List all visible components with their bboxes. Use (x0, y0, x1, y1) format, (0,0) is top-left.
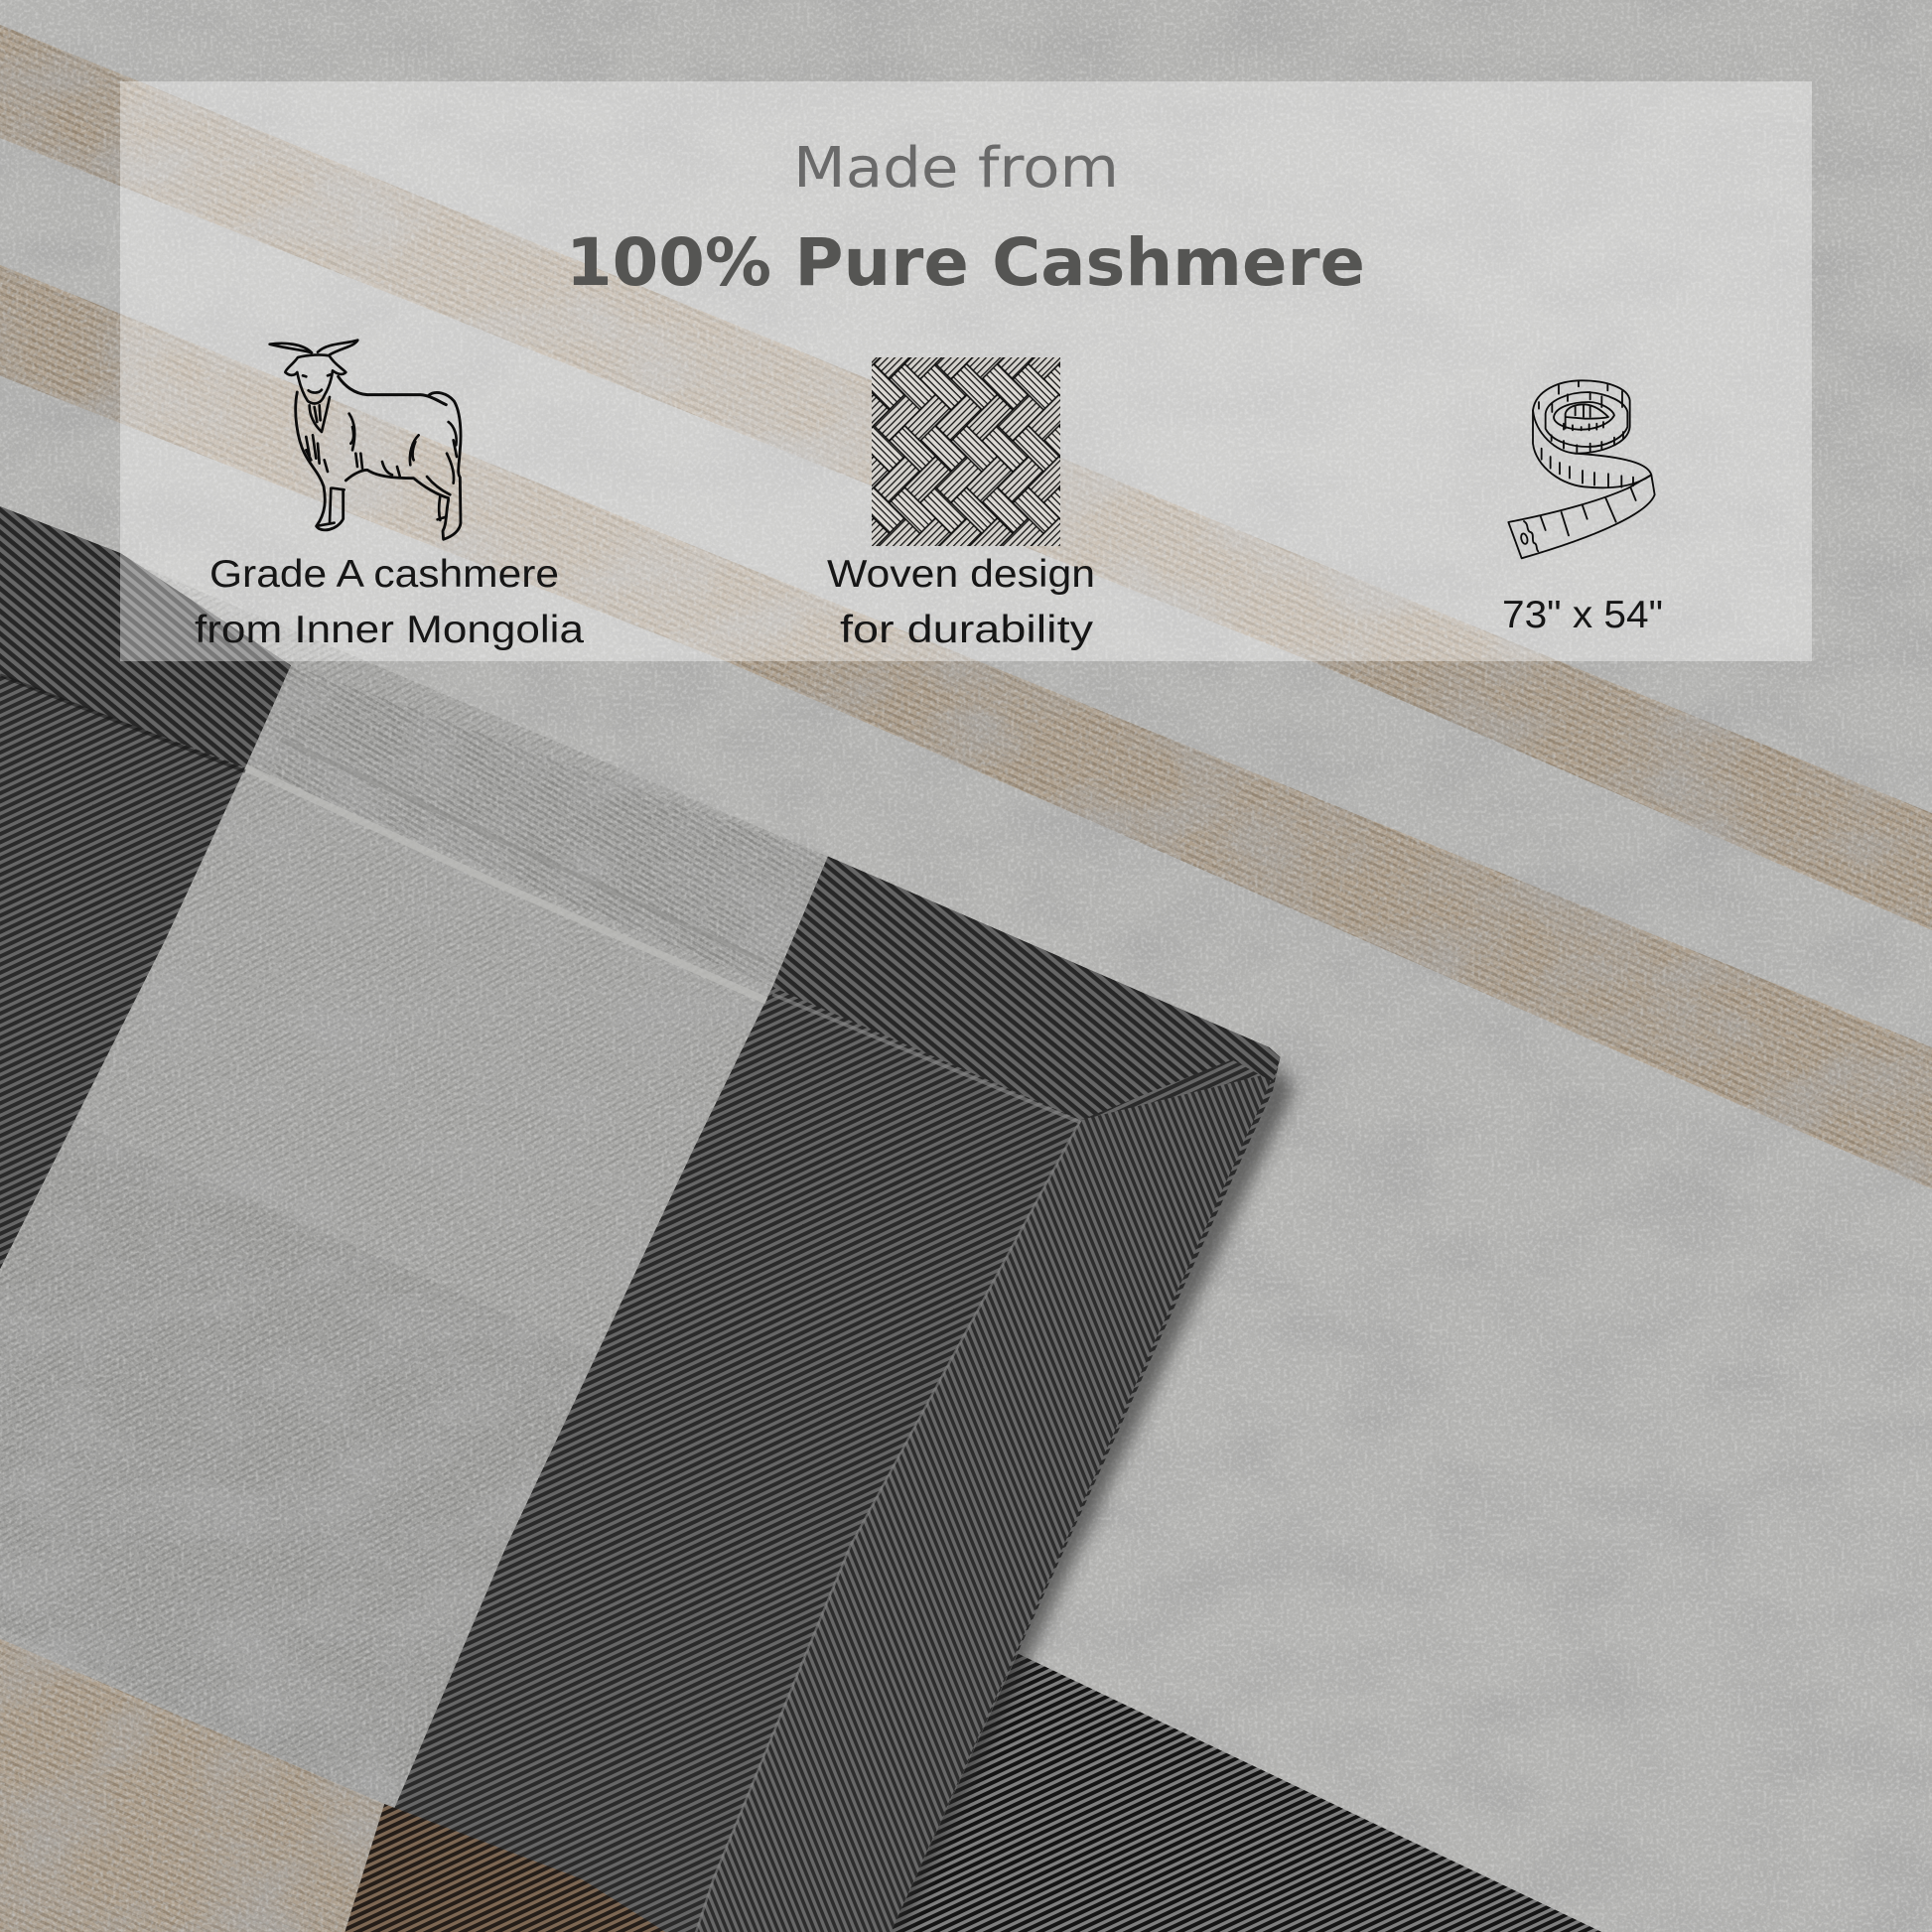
label: Grade A cashmere from Inner Mongolia: Grade A cashmere (209, 553, 559, 596)
heading: 100% Pure Cashmere: 100% Pure Cashmere (566, 224, 1365, 301)
brown dark crossing (345, 1804, 665, 1932)
label: Woven design for durability: for durability (840, 609, 1094, 651)
label: Woven design for durability: Woven design (827, 553, 1095, 596)
subtle plaid shade in grey field (0, 1121, 640, 1811)
label: Woven design for durability (827, 553, 1095, 651)
hem seam line (245, 767, 766, 1001)
icon: goat (270, 341, 461, 539)
hem flap grey (245, 665, 828, 987)
underlying dark stripe (891, 1654, 1601, 1932)
lower beige stripe (0, 265, 1932, 1189)
label: dimensions: 73" x 54" (1502, 594, 1663, 636)
dark corner flap (772, 857, 1281, 1120)
main dark band (345, 857, 1281, 1932)
fold band (696, 1072, 1276, 1932)
translucent info panel (120, 81, 1812, 661)
beige check bottom left (0, 1639, 384, 1932)
dark check flap (0, 506, 291, 767)
fold shadow (863, 1059, 1294, 1932)
icon: woven pattern (872, 357, 1060, 546)
upper beige stripe (0, 25, 1932, 930)
folded fabric grey field (0, 506, 1269, 1932)
label: Grade A cashmere from Inner Mongolia (195, 553, 584, 651)
title: Made from: Made from (793, 136, 1119, 201)
dark check top left (0, 506, 291, 1269)
icon: tape measure (1508, 380, 1655, 558)
label: Grade A cashmere from Inner Mongolia: from Inner Mongolia (195, 609, 584, 651)
